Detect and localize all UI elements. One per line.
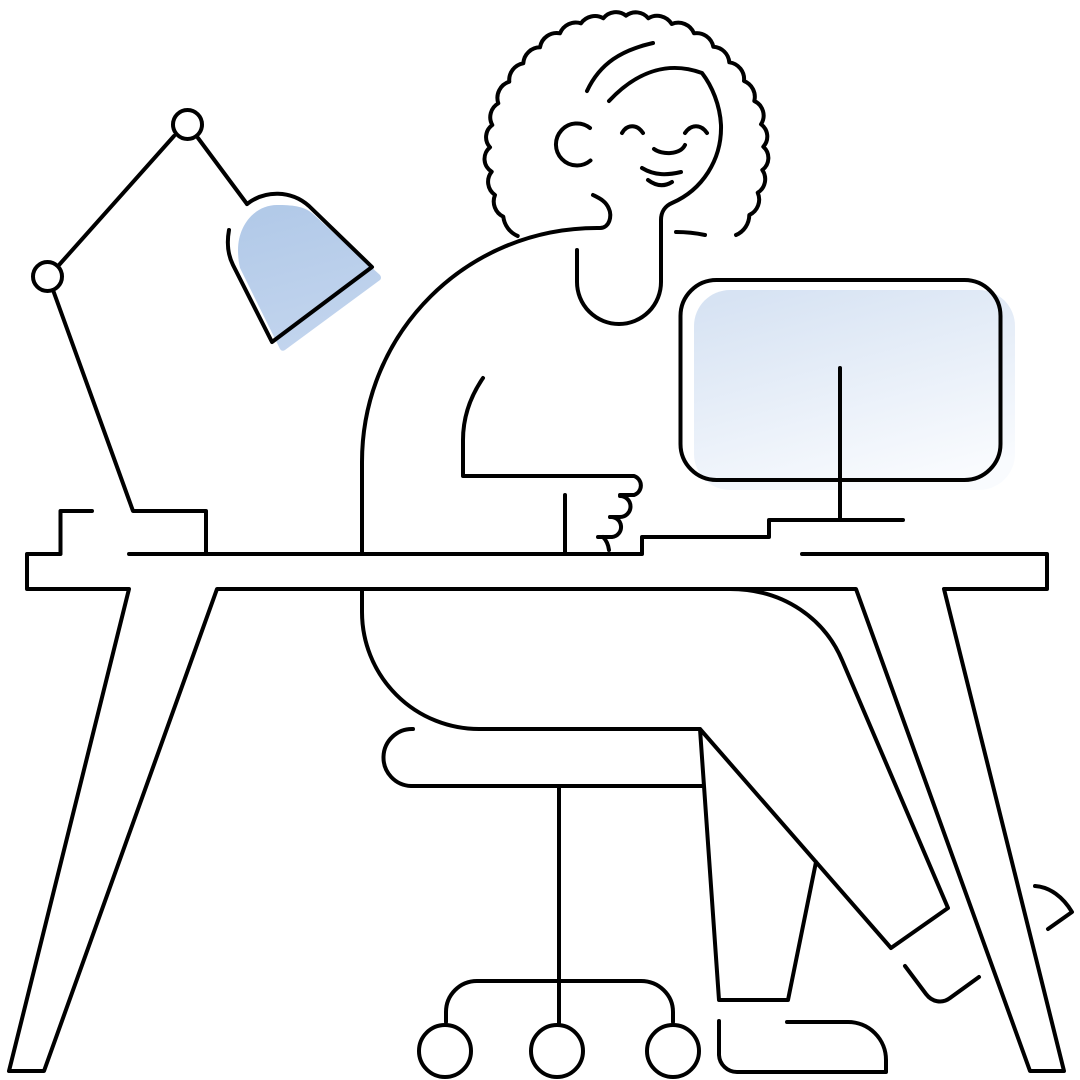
arm crease (563, 495, 567, 552)
chair wheel right (647, 1025, 699, 1077)
monitor screen fill (694, 290, 1015, 490)
lamp joint lower (33, 262, 62, 291)
hair (485, 12, 768, 236)
ear (556, 123, 590, 165)
lamp shade fill (238, 205, 381, 351)
lamp shade outline (228, 194, 372, 342)
left eye (622, 126, 643, 133)
desk lamp (33, 110, 381, 554)
office chair (383, 729, 702, 1077)
monitor (680, 280, 1015, 520)
lamp arm and base (53, 136, 247, 554)
chair wheel left (419, 1025, 471, 1077)
nose (654, 145, 685, 153)
desk surface with keyboard step (129, 520, 903, 554)
chair seat (383, 729, 702, 786)
face and neck (577, 68, 721, 324)
desk (9, 511, 1064, 1071)
collar line (676, 232, 705, 235)
chair base (446, 981, 673, 1022)
right eye (685, 126, 707, 133)
person (362, 12, 1072, 1072)
hips and legs (362, 589, 948, 1000)
planted shoe (719, 1021, 886, 1072)
raised foot (905, 966, 979, 1001)
hair part (587, 43, 653, 91)
torso and chin (362, 195, 610, 554)
arm and hand (463, 378, 641, 550)
mouth (642, 168, 681, 185)
raised foot toe (1035, 886, 1072, 929)
monitor frame (680, 280, 1000, 480)
chair post (557, 786, 561, 1025)
monitor stand (838, 368, 842, 520)
lamp joint upper (173, 110, 202, 139)
chair wheel middle (531, 1025, 583, 1077)
